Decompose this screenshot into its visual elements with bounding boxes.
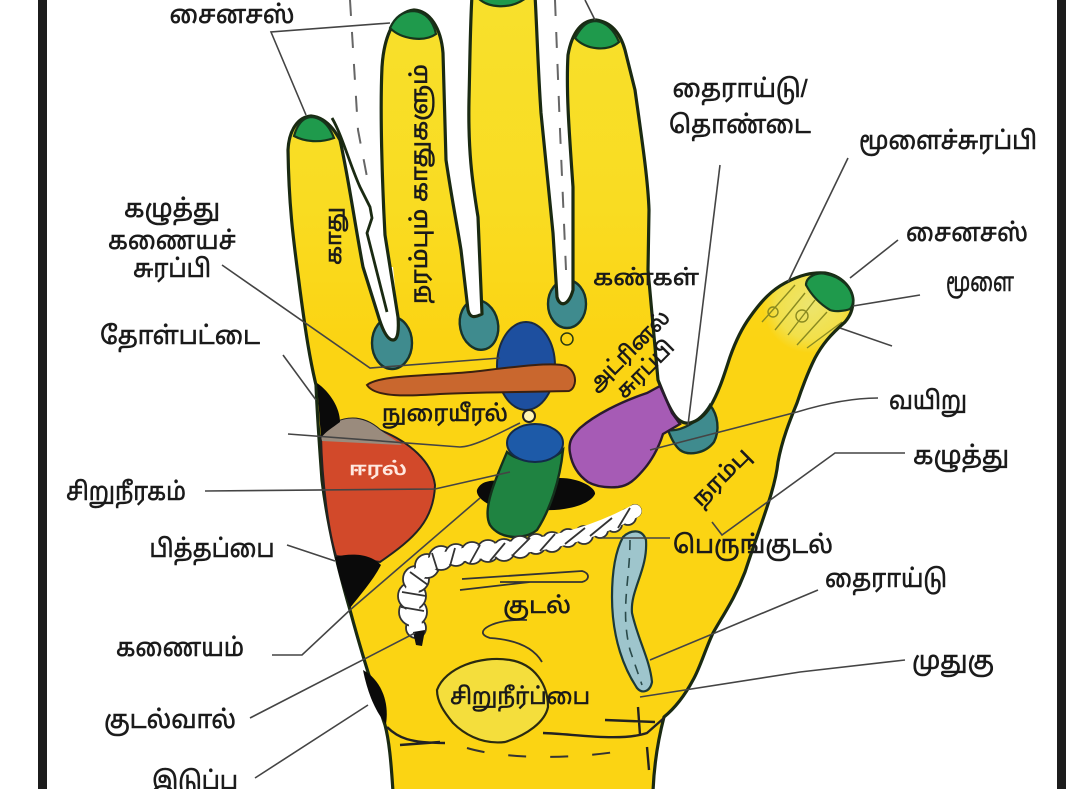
pale blue colon (612, 531, 652, 691)
shoulder black spot (317, 383, 340, 438)
white large intestine (398, 505, 641, 638)
label: sinus right: சைனசஸ் (906, 219, 1028, 247)
finger gap whites over knuckles (363, 233, 573, 340)
label: pituitary: மூளைச்சுரப்பி (859, 127, 1037, 156)
label: adrenal: அட்ரினல் (584, 306, 675, 397)
sinus green tips (294, 0, 853, 311)
hand illustration (288, 0, 858, 789)
leader lines (205, 0, 920, 778)
label: neck right: கழுத்து (913, 442, 1009, 472)
label: appendix: குடல்வால் (104, 706, 236, 736)
label: brain: மூளை (946, 267, 1014, 298)
label: shoulder: தோள்பட்டை (100, 322, 260, 352)
label: nerve: நரம்பு (688, 444, 756, 512)
heart blue oval (497, 322, 555, 410)
small circle below lung (523, 410, 535, 422)
label: stomach: வயிறு (889, 387, 967, 417)
label: neck pancreas gland: கழுத்து (124, 195, 220, 225)
labels inside hand (321, 64, 756, 712)
green kidney cylinder (488, 450, 563, 537)
label: lung: நுரையீரல் (382, 400, 508, 429)
purple stomach (569, 386, 680, 487)
small intestine curves (460, 571, 588, 662)
label: large intestine: பெருங்குடல் (673, 531, 833, 561)
label: ear: காது (321, 207, 348, 265)
label: throat: தொண்டை (669, 111, 811, 141)
appendix black tip (413, 630, 425, 646)
lung brown bar (367, 364, 575, 395)
label: pancreas: கணையம் (116, 634, 244, 662)
hand outline (288, 0, 853, 789)
label: liver: ஈரல் (349, 459, 407, 479)
label: eyes: கண்கள் (593, 265, 699, 290)
label: sinus top: சைனசஸ் (170, 1, 294, 29)
label: gallbladder: பித்தப்பை (150, 535, 274, 565)
hip black spot (363, 670, 387, 724)
label: intestine: குடல் (503, 592, 571, 620)
colon centre line (626, 540, 642, 685)
thumb tip lines (762, 285, 842, 348)
liver grey top (321, 419, 402, 445)
label: back: முதுகு (912, 647, 994, 677)
label: nerves and ears: நரம்பும் காதுகளும் (406, 64, 435, 304)
label: kidney: சிறுநீரகம் (66, 478, 186, 508)
label: gland line: சுரப்பி (133, 255, 211, 283)
dashed guide lines between fingers (350, 0, 566, 270)
fold at little finger (332, 118, 387, 312)
knuckle teal nodes (372, 280, 717, 453)
gall bladder black spot (335, 555, 381, 608)
thumb tip tint (765, 275, 850, 351)
label: bladder: சிறுநீர்ப்பை (450, 683, 590, 712)
bladder (437, 659, 548, 742)
label: adrenal gland: சுரப்பி (612, 336, 679, 403)
wrist dashed line (467, 748, 615, 757)
label: thyroid: தைராய்டு (825, 565, 947, 595)
label: pancreas line: கணையச் (108, 227, 236, 255)
blue adrenal (507, 424, 563, 462)
wrist creases (387, 707, 664, 770)
hand silhouette (288, 0, 853, 789)
liver red (321, 419, 435, 562)
small eye circle (561, 333, 573, 345)
label: thyroid throat: தைராய்டு/ (672, 75, 808, 105)
kidneys black (477, 478, 595, 510)
